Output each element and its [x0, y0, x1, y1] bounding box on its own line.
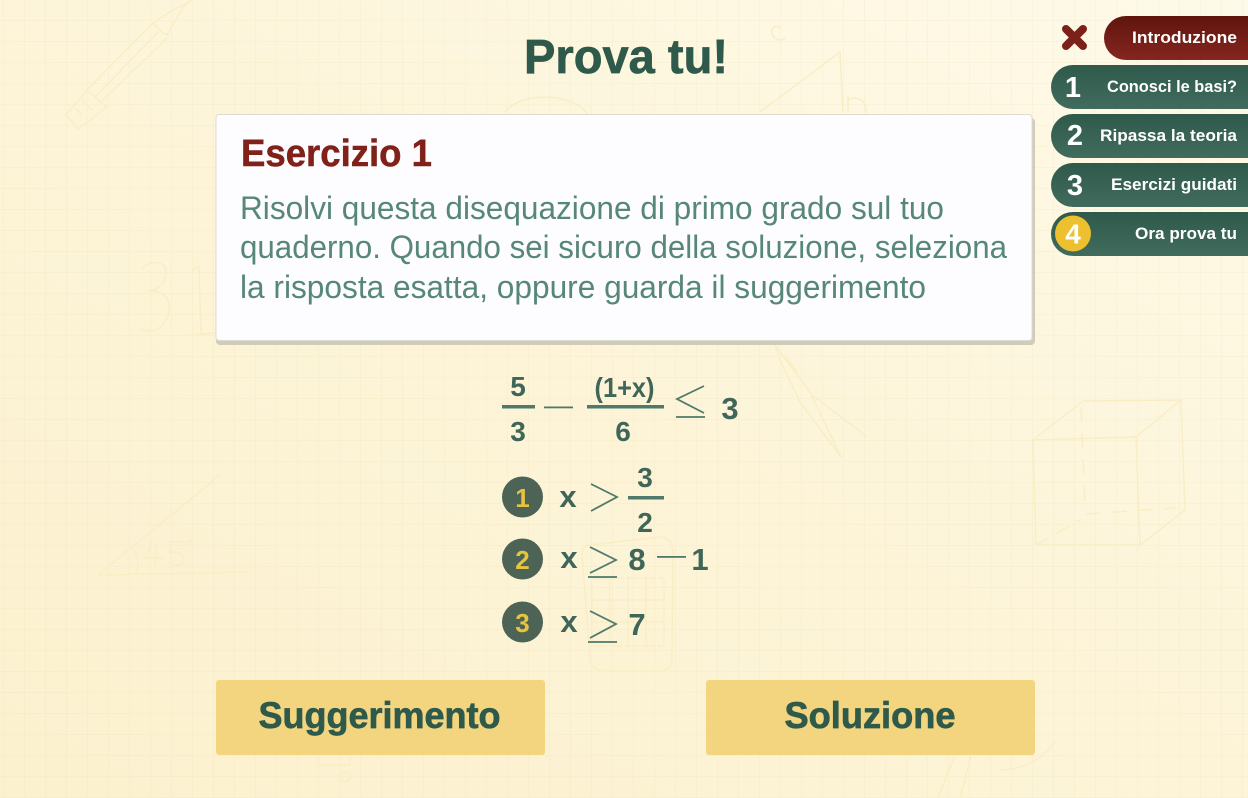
background sketch: pencil: [66, 0, 192, 129]
answer option 1: 2: [637, 507, 653, 538]
nav: esercizi guidati: 3: [1067, 170, 1083, 202]
exercise instructions: quaderno. Quando sei sicuro della soluzione, seleziona: [240, 229, 1007, 265]
background sketch: calculator: [582, 537, 673, 671]
nav: ora prova tu: Ora prova tu: [1135, 224, 1237, 243]
nav: esercizi guidati: [1051, 163, 1248, 207]
inequality: 5: [510, 371, 526, 402]
background sketch: compass: [775, 345, 866, 457]
background sketch: ruler bottom: [318, 742, 1055, 798]
nav: ora prova tu: [1051, 212, 1248, 256]
answer option 1: 1: [515, 483, 530, 513]
nav: ripassa la teoria: [1051, 114, 1248, 158]
panel: exercise text: [216, 114, 1035, 345]
nav: ripassa la teoria: 2: [1067, 120, 1083, 152]
nav: ripassa la teoria: Ripassa la teoria: [1100, 126, 1238, 145]
inequality: 6: [615, 416, 631, 447]
answer option 3: [502, 602, 646, 642]
button: suggerimento: [216, 680, 545, 755]
answer option 3: 7: [628, 607, 646, 642]
answer option 2: x: [560, 540, 578, 575]
background sketch: triangle top: [760, 26, 866, 112]
nav: ora prova tu: 4: [1065, 218, 1081, 250]
answer option 1: x: [559, 479, 577, 514]
exercise instructions: [240, 190, 1007, 305]
inequality: 3: [510, 416, 526, 447]
answer option 2: 8: [628, 542, 646, 577]
inequality: [502, 371, 739, 447]
inequality: (1+x): [594, 372, 654, 403]
icon: close: [1066, 29, 1083, 46]
answer option 3: x: [560, 604, 578, 639]
button: soluzione: [706, 680, 1035, 755]
background sketch: digits left: [140, 263, 216, 335]
background sketch: 45 degree angle: [98, 475, 247, 575]
exercise heading: Esercizio 1: [241, 133, 432, 175]
answer option 2: 1: [691, 542, 709, 577]
answer option 2: 2: [515, 545, 530, 575]
title: Prova tu!: [524, 31, 728, 84]
inequality: 3: [721, 391, 739, 426]
answer option 2: [502, 538, 709, 580]
exercise instructions: Risolvi questa disequazione di primo grado sul tuo: [240, 190, 944, 226]
exercise instructions: la risposta esatta, oppure guarda il suggerimento: [240, 269, 926, 305]
nav: conosci le basi: 1: [1065, 72, 1081, 104]
nav: introduzione: Introduzione: [1132, 28, 1237, 47]
nav: introduzione: [1104, 16, 1248, 60]
background sketch: cube: [1033, 400, 1185, 545]
nav: conosci le basi: [1051, 65, 1248, 109]
button: suggerimento: Suggerimento: [258, 695, 500, 736]
answer option 3: 3: [515, 608, 530, 638]
background sketch: circle top: [505, 97, 587, 113]
nav: esercizi guidati: Esercizi guidati: [1111, 175, 1237, 194]
nav: conosci le basi: Conosci le basi?: [1107, 77, 1237, 96]
button: soluzione: Soluzione: [784, 695, 956, 736]
answer option 1: 3: [637, 462, 653, 493]
answer option 1: [502, 462, 664, 538]
